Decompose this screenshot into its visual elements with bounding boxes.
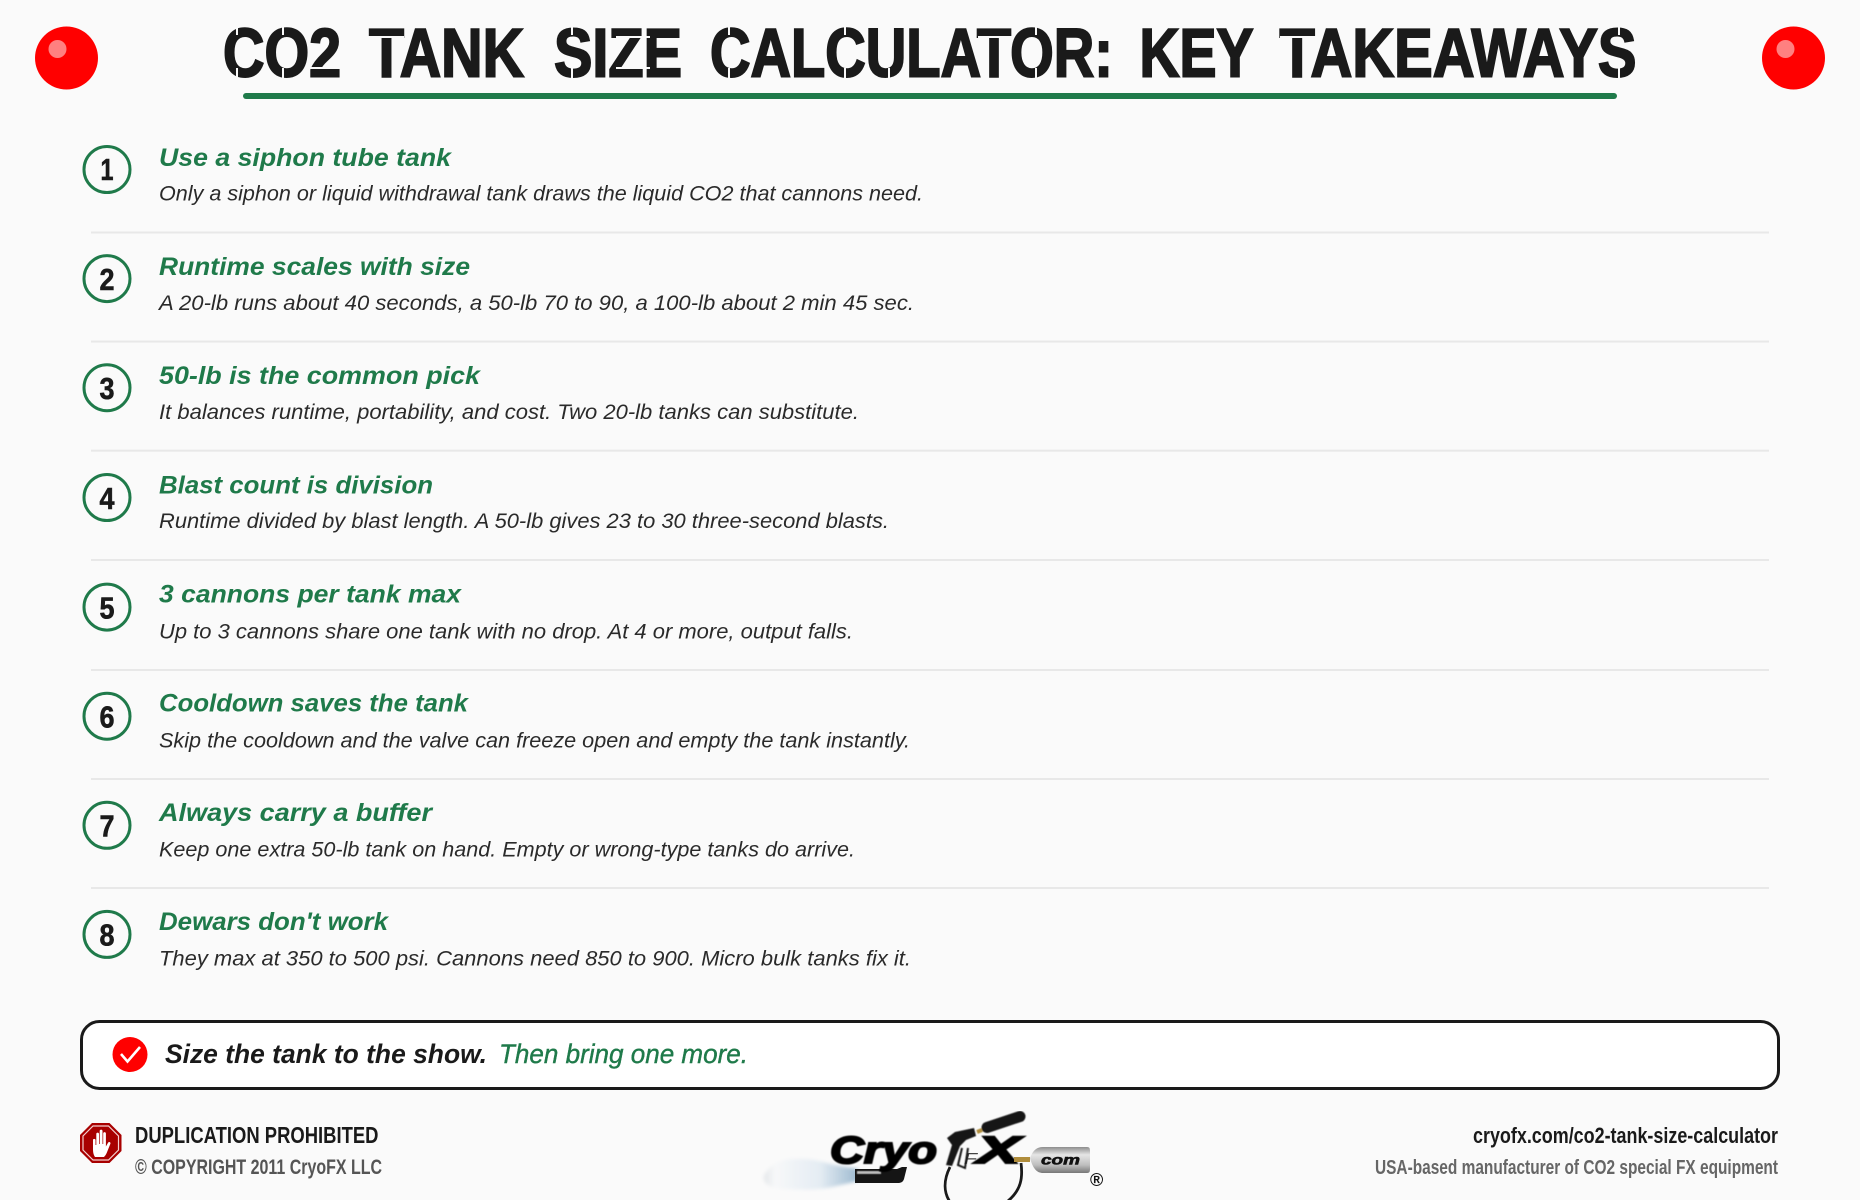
title: TAKEAWAYS — [1280, 14, 1636, 92]
number badge 2: 2 — [100, 262, 114, 297]
number badge 6 — [84, 693, 130, 739]
number badge 2 — [84, 256, 130, 302]
title underline — [243, 93, 1617, 99]
logo wordmark: Cryo — [830, 1130, 937, 1172]
logo: CryoFX: F — [964, 1151, 979, 1168]
description 2: A 20-lb runs about 40 seconds, a 50-lb 70 to 90, a 100-lb about 2 min 45 sec. — [157, 292, 914, 315]
number badge 4: 4 — [100, 481, 115, 516]
number badge 1 — [84, 146, 130, 192]
number badge 1: 1 — [100, 152, 114, 187]
description 4: Runtime divided by blast length. A 50-lb gives 23 to 30 three-second blasts. — [159, 510, 889, 533]
footer: url and tagline: cryofx.com/co2-tank-size-calculator — [1473, 1123, 1778, 1148]
heading 5: 3 cannons per tank max — [159, 581, 462, 609]
logo: CryoFX — [764, 1116, 1103, 1200]
number badge 7: 7 — [100, 808, 114, 844]
logo tank — [1030, 1147, 1090, 1173]
title: CO2 — [223, 14, 341, 92]
logo valve — [1014, 1157, 1030, 1162]
number badge 8: 8 — [100, 918, 114, 952]
callout text: Then bring one more. — [499, 1039, 748, 1069]
footer: duplication notice: DUPLICATION PROHIBITED — [135, 1122, 378, 1148]
title: KEY — [1140, 14, 1253, 92]
description 8: They max at 350 to 500 psi. Cannons need 850 to 900. Micro bulk tanks fix it. — [159, 948, 911, 971]
takeaway 7 — [84, 799, 855, 862]
heading 3: 50-lb is the common pick — [159, 362, 481, 390]
description 7: Keep one extra 50-lb tank on hand. Empty or wrong-type tanks do arrive. — [159, 838, 855, 862]
heading 6: Cooldown saves the tank — [159, 690, 469, 718]
title: TANK — [369, 14, 524, 92]
heading 8: Dewars don't work — [159, 908, 389, 936]
icon: red dot left — [35, 26, 98, 90]
description 1: Only a siphon or liquid withdrawal tank draws the liquid CO2 that cannons need. — [159, 183, 923, 206]
heading 7: Always carry a buffer — [158, 799, 433, 827]
heading 4: Blast count is division — [159, 471, 433, 499]
title: SIZE — [554, 14, 682, 92]
takeaway 2 — [84, 253, 914, 315]
icon: red dot right — [1762, 26, 1825, 90]
description 6: Skip the cooldown and the valve can freeze open and empty the tank instantly. — [159, 729, 910, 752]
description 3: It balances runtime, portability, and cost. Two 20-lb tanks can substitute. — [159, 401, 859, 424]
number badge 6: 6 — [100, 700, 114, 734]
logo fog plume — [764, 1159, 858, 1190]
logo hose — [945, 1163, 1022, 1200]
callout text: Size the tank to the show. — [165, 1039, 487, 1069]
icon: red check — [112, 1037, 148, 1072]
footer: duplication notice: © COPYRIGHT 2011 CryoFX LLC — [135, 1156, 382, 1179]
heading 1: Use a siphon tube tank — [159, 144, 452, 172]
title: CALCULATOR: — [710, 14, 1113, 92]
icon: stop hand — [80, 1123, 122, 1163]
takeaway 6 — [84, 690, 910, 752]
takeaway 4 — [84, 471, 889, 533]
number badge 3 — [84, 365, 130, 411]
number badge 5: 5 — [100, 590, 114, 626]
callout — [82, 1022, 1778, 1088]
footer: duplication notice — [135, 1122, 382, 1179]
logo cannon — [946, 1116, 1020, 1168]
takeaway 8 — [84, 908, 911, 971]
takeaway 5 — [84, 581, 853, 643]
number badge 8 — [84, 911, 130, 957]
logo: CryoFX: X — [974, 1130, 1024, 1172]
logo tank: com — [1041, 1152, 1080, 1168]
takeaway 1 — [84, 144, 923, 206]
description 5: Up to 3 cannons share one tank with no drop. At 4 or more, output falls. — [159, 620, 853, 643]
takeaway 3 — [84, 362, 859, 424]
number badge 7 — [84, 802, 130, 848]
number badge 3: 3 — [100, 371, 114, 406]
logo registered mark: ® — [1090, 1170, 1103, 1190]
logo nozzle — [855, 1167, 907, 1183]
footer: url and tagline — [1375, 1123, 1778, 1179]
number badge 4 — [84, 474, 130, 520]
heading 2: Runtime scales with size — [159, 253, 470, 281]
number badge 5 — [84, 584, 130, 630]
